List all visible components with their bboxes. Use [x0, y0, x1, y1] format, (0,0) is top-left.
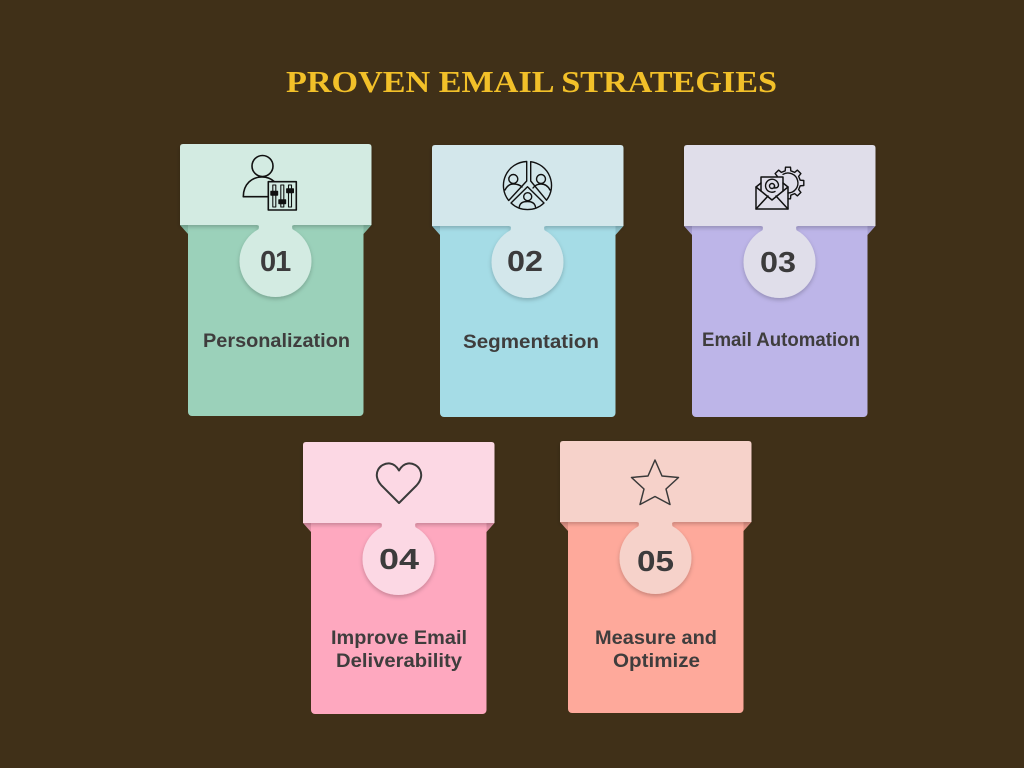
icon: person with sliders [243, 156, 296, 210]
icon: envelope with gear [756, 167, 804, 209]
panel: 02 Segmentation [432, 145, 624, 417]
card body [311, 517, 486, 714]
panel: 03 Email Automation [684, 145, 876, 417]
label: Improve Email [331, 628, 467, 649]
card header with number tab [180, 144, 372, 297]
label line 2: Optimize [613, 651, 700, 672]
card header with number tab [432, 145, 624, 298]
title: PROVEN EMAIL STRATEGIES [286, 64, 777, 99]
panel: 04 Improve Email Deliverability [303, 442, 494, 714]
card body [568, 516, 744, 713]
number: 01 [260, 246, 291, 278]
icon: star [632, 460, 678, 504]
card body [692, 220, 868, 417]
card header with number tab [303, 442, 494, 595]
number: 02 [507, 246, 543, 278]
label: Email Automation [702, 330, 860, 351]
icon: heart [377, 463, 421, 503]
panel: 01 Personalization [180, 144, 372, 416]
label: Personalization [203, 331, 350, 352]
number: 05 [637, 546, 674, 578]
number: 04 [379, 544, 419, 576]
label: Segmentation [463, 332, 599, 353]
label line 2: Deliverability [336, 651, 462, 672]
panel: 05 Measure and Optimize [560, 441, 752, 713]
number: 03 [760, 247, 796, 279]
card header with number tab [684, 145, 876, 298]
card header with number tab [560, 441, 752, 594]
card body [188, 219, 364, 416]
label: Measure and [595, 628, 717, 649]
icon: segmented audience pie [503, 162, 552, 210]
card body [440, 220, 616, 417]
